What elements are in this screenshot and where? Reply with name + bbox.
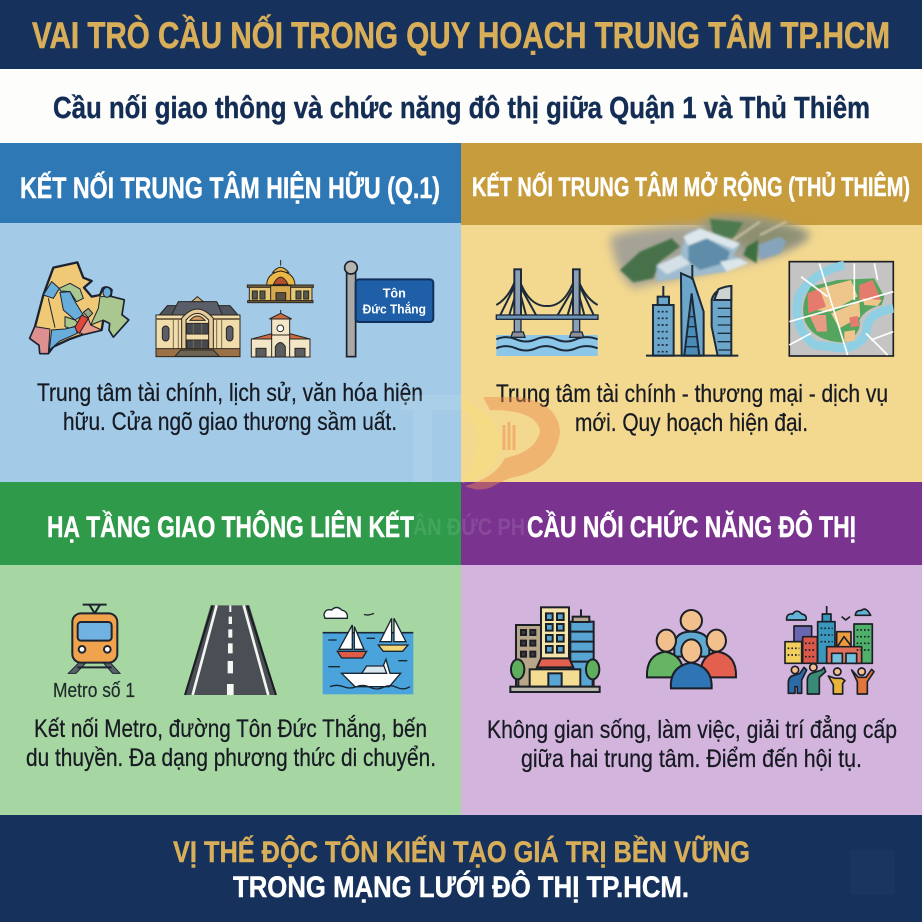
icon: planning map (789, 262, 893, 356)
icon: street sign (345, 261, 433, 357)
heading: transport infrastructure: HẠ TẦNG GIAO THÔNG LIÊN KẾT (47, 510, 414, 544)
icon: skyscrapers (646, 265, 738, 356)
text: urban function description (487, 714, 897, 773)
label: Metro line 1: Metro số 1 (53, 680, 135, 702)
top title band (0, 0, 922, 69)
icon: group of people (647, 610, 736, 688)
panel: transport infrastructure (0, 482, 461, 815)
text: extended centre description: mới. Quy hoạch hiện đại. (575, 409, 808, 437)
watermark logo (400, 395, 560, 541)
panel: extended centre (Thu Thiem) (461, 143, 922, 482)
icon: Saigon post office (251, 310, 310, 357)
closing line 1: VỊ THẾ ĐỘC TÔN KIẾN TẠO GIÁ TRỊ BỀN VỮNG (173, 835, 750, 869)
icon: district map (30, 262, 128, 353)
photo: aerial view of new urban area (610, 218, 810, 288)
text: transport description: du thuyền. Đa dạng phương thức di chuyển. (26, 744, 436, 772)
text: transport description (26, 714, 436, 772)
heading: current centre: KẾT NỐI TRUNG TÂM HIỆN HỮU (Q.1) (20, 171, 440, 205)
text: current centre description (37, 379, 423, 436)
icon: city with crowd (785, 606, 874, 694)
watermark text: ÂN ĐỨC PH (413, 513, 525, 541)
panel: urban function (461, 482, 922, 815)
icon: street sign: Đức Thắng (363, 301, 426, 316)
sign text: Tôn (383, 286, 406, 300)
icon: road (184, 605, 277, 695)
text: transport description: Kết nối Metro, đường Tôn Đức Thắng, bến (34, 714, 427, 743)
text: extended centre description (496, 380, 888, 437)
icon: bridge (496, 269, 598, 356)
bottom banner (0, 815, 922, 922)
text: urban function description: giữa hai trung tâm. Điểm đến hội tụ. (521, 745, 862, 773)
icon: opera house (156, 297, 240, 357)
subtitle band (0, 69, 922, 143)
text: current centre description: hữu. Cửa ngõ giao thương sầm uất. (63, 408, 397, 436)
text: current centre description: Trung tâm tài chính, lịch sử, văn hóa hiện (37, 379, 423, 407)
closing line 2: TRONG MẠNG LƯỚI ĐÔ THỊ TP.HCM. (233, 870, 689, 904)
icon: Ben Thanh market (247, 260, 313, 303)
icon: metro train (68, 605, 120, 673)
panel: current centre (District 1) (0, 143, 461, 482)
icon: marina with boats (323, 607, 413, 694)
icon: mixed-use buildings (510, 607, 600, 692)
